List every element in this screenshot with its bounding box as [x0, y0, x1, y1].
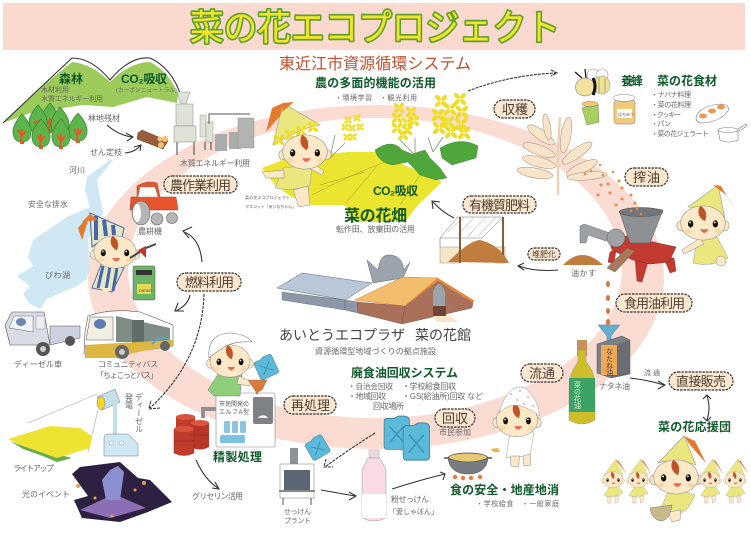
- title band: [3, 3, 745, 50]
- caption: community bus: コミュニティバス: [98, 360, 158, 369]
- icon: honey jar: はちみつ: [618, 111, 634, 117]
- bullets: ・学校給食回収: [402, 381, 456, 391]
- mascot: helmet worker: [207, 333, 267, 396]
- panel: river: [17, 160, 113, 309]
- label: direct sales: 直接販売: [676, 374, 726, 389]
- pruned branches label and arrow: せん定枝: [90, 147, 122, 157]
- arrow: fuel to generator: [149, 294, 204, 409]
- title: 菜の花エコプロジェクト: [190, 7, 560, 48]
- bullets: ・GS(給油所)回収 など: [402, 391, 483, 401]
- heading: food safety: 食の安全・地産地消: [450, 482, 559, 497]
- caption: soap plant: せっけん: [284, 508, 311, 516]
- arrow: oil cake to compost: [518, 263, 558, 270]
- label: composting: [528, 248, 560, 260]
- icon: pouring can: [253, 353, 279, 381]
- arrow: refining to glycerin: [196, 460, 219, 489]
- icon: collection cans: [384, 416, 430, 460]
- label: farm work use: 農作業利用: [170, 178, 231, 193]
- label: oil pressing: [625, 168, 668, 186]
- building: Aito Eco Plaza: [277, 255, 475, 324]
- mascot caption: [245, 194, 296, 209]
- CO2 absorption: CO₂吸収: [373, 184, 418, 198]
- bullets: ・地域回収: [348, 391, 386, 401]
- caption: tiller: 農耕機: [138, 226, 162, 236]
- arrow: to bee: [468, 70, 557, 91]
- vertical label: diesel generation: ディーゼル: [134, 392, 144, 433]
- distribution arrow and label: [630, 368, 665, 389]
- oil press: [580, 208, 676, 282]
- heading: refining: 精製処理: [213, 449, 262, 464]
- compost shed: [440, 217, 509, 263]
- lit field: [8, 426, 92, 462]
- caption: woody energy: 木質エネルギー利用: [180, 158, 250, 168]
- vertical label: diesel generation: 発電: [124, 393, 134, 409]
- mascot: striped with fuel pump: [78, 213, 156, 293]
- heading: supporters: 菜の花応援団: [658, 419, 731, 434]
- label: harvest: [494, 100, 535, 118]
- label: reprocessing: 再処理: [291, 398, 330, 413]
- icon: fuel pump: DIESEL: [139, 288, 154, 293]
- bullets: ・環境学習 ・観光利用: [335, 93, 417, 102]
- food list: ・ナバナ料理: [651, 90, 691, 99]
- arrow: plant to soap: [321, 490, 356, 500]
- soap plant: [279, 448, 315, 505]
- icon: soap bottle: [362, 450, 386, 521]
- pruned branches label and arrow: [90, 145, 141, 157]
- caption: light event: 光のイベント: [22, 489, 70, 499]
- building name: あいとうエコプラザ: [279, 327, 405, 343]
- label: collection: 回収: [442, 411, 468, 426]
- trees: [13, 103, 87, 148]
- biomass machine: [174, 92, 254, 155]
- mascot caption: 菜の花エコプロジェクト: [245, 194, 290, 200]
- supporter small 3: [698, 460, 723, 503]
- flower stems: [330, 135, 443, 158]
- caption: powdered soap: 「愛しゃぼん」: [389, 507, 438, 516]
- elfa machine: [203, 393, 275, 447]
- icon: rapeseed oil can: なたね油: [606, 348, 613, 377]
- flowers: [341, 92, 471, 141]
- label: composting: 堆肥化: [532, 249, 556, 259]
- label: fuel use: 燃料利用: [185, 275, 234, 290]
- plant: seed pods: [516, 114, 607, 195]
- icon: drums: [174, 414, 209, 456]
- icon: gelato cup: [718, 124, 747, 142]
- label: oil pressing: 搾油: [633, 170, 660, 185]
- icon: floodlight and generator: [97, 389, 138, 456]
- caption: powdered soap: [389, 494, 438, 516]
- food list: ・菜の花ジェラート: [651, 129, 709, 138]
- forest residue label and arrow: 林地残材: [88, 113, 120, 123]
- background ring: resource cycle: [88, 105, 664, 449]
- icon: tractor: [130, 182, 178, 225]
- oil cake pile: [563, 255, 603, 265]
- mascot: Aina-chan: [262, 102, 331, 207]
- caption: citizen participation: 市民参加: [439, 427, 471, 437]
- distribution arrow and label: 流通: [644, 368, 660, 377]
- heading: 農の多面的機能の活用: [315, 75, 436, 90]
- caption: soap plant: プラント: [284, 517, 311, 525]
- seeds falling: [584, 164, 638, 212]
- caption: community bus: 「ちょこっとバス」: [96, 371, 158, 380]
- mascot: pressing oil: [677, 185, 737, 266]
- elfa machine: エルフA型: [219, 408, 249, 416]
- supporter small 4: [723, 460, 748, 503]
- panel: used oil collection: [348, 365, 483, 411]
- food list: ・クッキー: [651, 111, 681, 119]
- arrow: fertilizer to field: [432, 201, 454, 218]
- heading: 廃食油回収システム: [351, 365, 458, 380]
- icon: oil bottle: 菜の花油: [574, 380, 581, 410]
- icon: plant oil can: [304, 434, 331, 461]
- light event: [72, 462, 172, 522]
- caption: light up: ライトアップ: [13, 464, 54, 473]
- woody energy use: 木質エネルギー利用: [41, 94, 103, 103]
- bullets: 回収場所: [373, 401, 404, 411]
- lake Biwa: びわ湖: [45, 271, 70, 280]
- label: organic fertilizer: 有機質肥料: [469, 198, 530, 213]
- mascots: supporters: [601, 436, 748, 522]
- icon: bread: [696, 104, 728, 123]
- mascot caption: マスコット「あいなちゃん」: [245, 203, 296, 209]
- icon: funnel: [598, 325, 620, 342]
- river label: 河川: [69, 165, 85, 175]
- building name second part: 菜の花館: [415, 327, 471, 343]
- subtitle: 東近江市資源循環システム: [279, 55, 471, 73]
- safe drainage: 安全な排水: [28, 199, 68, 209]
- bullets: [348, 381, 483, 411]
- icon: diesel truck: [5, 312, 80, 356]
- icon: rapeseed oil can: [597, 336, 630, 378]
- caption: community bus: [96, 360, 158, 380]
- icon: frying pot: [444, 453, 492, 480]
- panel: beekeeping and foods: [621, 73, 717, 138]
- icon: honey jar: [613, 94, 635, 124]
- caption: soap plant: [284, 508, 311, 525]
- caption: oil cake: 油かす: [571, 268, 596, 278]
- oil drops: [606, 281, 610, 325]
- heading: CO2 absorption: CO₂吸収: [121, 72, 167, 86]
- heading: beekeeping: 養蜂: [621, 73, 643, 88]
- bullets: ・自治会回収: [348, 381, 394, 391]
- supporter small 2: [626, 460, 651, 503]
- forest uses: 木材利用: [41, 85, 69, 94]
- arrow: cans to plant: [324, 433, 375, 467]
- caption: glycerin use: グリセリン活用: [192, 491, 243, 501]
- elfa machine: 市民開発の: [219, 400, 249, 408]
- label: distribution: 流通: [529, 366, 555, 381]
- label: fuel use: [177, 273, 241, 291]
- field name: 菜の花畑: [344, 206, 407, 225]
- arrow: soap to food: [392, 472, 445, 489]
- arrow: fuel to vehicles: [175, 295, 190, 311]
- building description: 資源循環型地域づくりの拠点施設: [315, 346, 436, 356]
- panel: multifunctional farming: [315, 75, 436, 102]
- label: edible oil use: 食用油利用: [624, 296, 685, 311]
- bullets: school and household: ・学校給食 ・一般家庭: [476, 499, 559, 508]
- arrow: two-way: [703, 395, 711, 421]
- caption: powdered soap: 粉せっけん: [391, 494, 429, 504]
- supporter small 1: [601, 460, 626, 503]
- label: collection: [435, 409, 475, 427]
- food list: ・菜の花料理: [651, 100, 691, 109]
- label: harvest: 収穫: [502, 102, 528, 117]
- field note: 転作田、放棄田の活用: [336, 224, 415, 234]
- forest residue label and arrow: [88, 113, 133, 141]
- caption: rapeseed oil: ナタネ油: [599, 381, 630, 391]
- heading: ingredients: 菜の花食材: [657, 73, 717, 88]
- icon: fuel pump: [133, 266, 155, 300]
- food list: [651, 90, 709, 138]
- label: reprocessing: [284, 396, 336, 414]
- arrow: fuel to tractor: [183, 227, 202, 262]
- icon: logs: [137, 130, 168, 149]
- light beam lines: [28, 394, 98, 452]
- caption: diesel truck: ディーゼル車: [14, 359, 62, 369]
- heading: forest: 森林: [59, 71, 83, 86]
- vertical label: diesel generation: [124, 392, 144, 433]
- mascot: cook: [490, 387, 541, 467]
- food list: ・パン: [651, 120, 671, 128]
- label: direct sales: [669, 372, 733, 390]
- carbon neutral: (カーボンニュートラル): [116, 86, 177, 94]
- icon: honeybee: [575, 69, 610, 125]
- panel: forest: [3, 58, 181, 148]
- supporter main: [650, 436, 706, 522]
- panel: rapeseed field: [262, 92, 478, 234]
- label: edible oil use: [616, 294, 692, 312]
- label: distribution: [521, 364, 563, 382]
- icon: oil bottle: [569, 340, 595, 424]
- icon: community bus: [84, 311, 173, 359]
